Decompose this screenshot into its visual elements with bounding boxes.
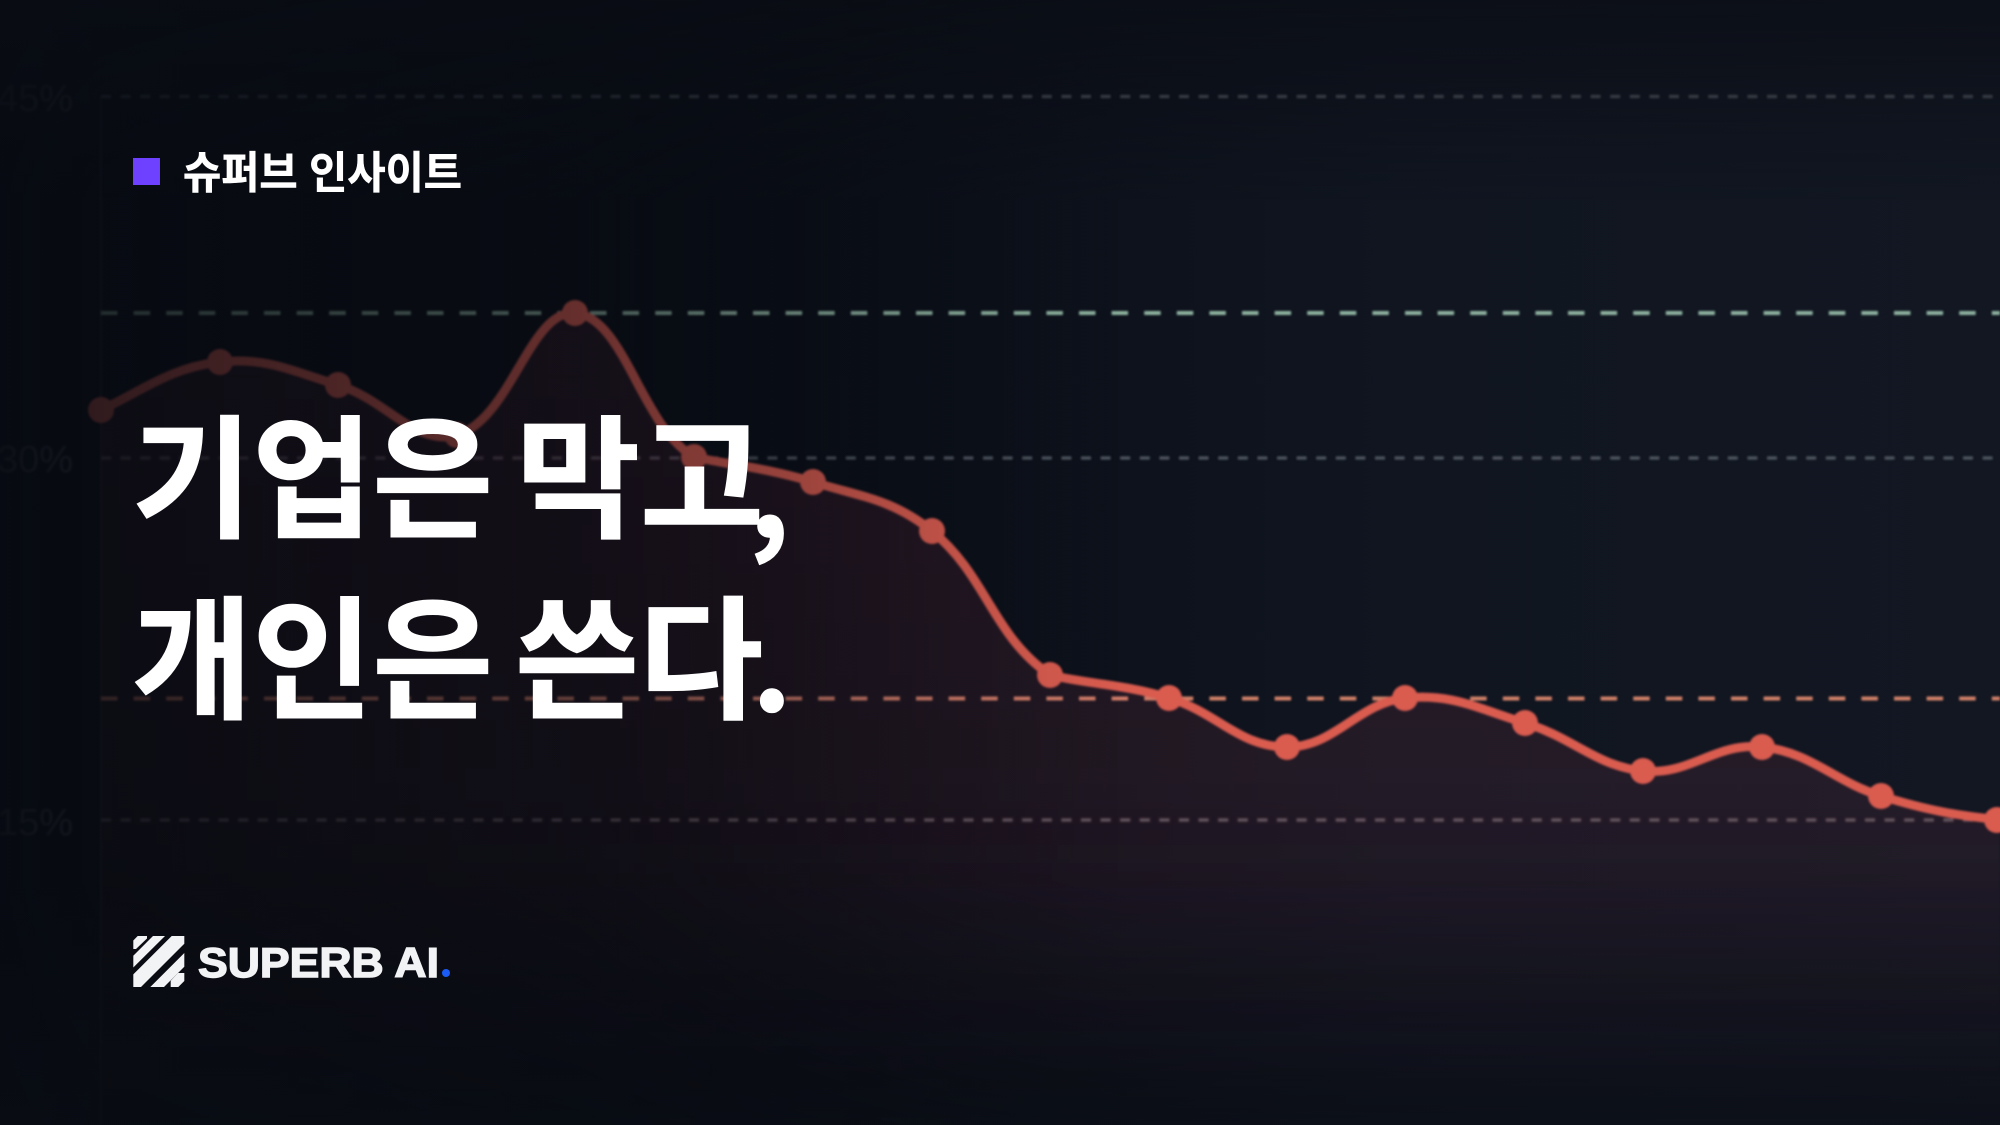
- top fade: [0, 0, 2000, 200]
- logo: [133, 936, 450, 987]
- section marker: purple square: [133, 158, 160, 185]
- bottom fade: [0, 880, 2000, 1125]
- title: [132, 392, 792, 746]
- wordmark: SUPERB AI: [198, 939, 439, 986]
- title: 막고: [516, 408, 764, 556]
- y axis labels: [0, 78, 73, 844]
- section label: 슈퍼브 인사이트: [183, 149, 462, 198]
- title: 개인은: [132, 589, 493, 737]
- area under line: [101, 313, 2000, 1125]
- blue dot: [442, 969, 450, 977]
- title: ,: [749, 392, 790, 573]
- data points: [88, 300, 2000, 833]
- red trend line: [101, 313, 2000, 820]
- icon: diagonal stripes: [133, 936, 184, 987]
- title: 쓴다: [515, 589, 763, 737]
- title: 기업은: [132, 408, 493, 556]
- title: .: [752, 569, 792, 746]
